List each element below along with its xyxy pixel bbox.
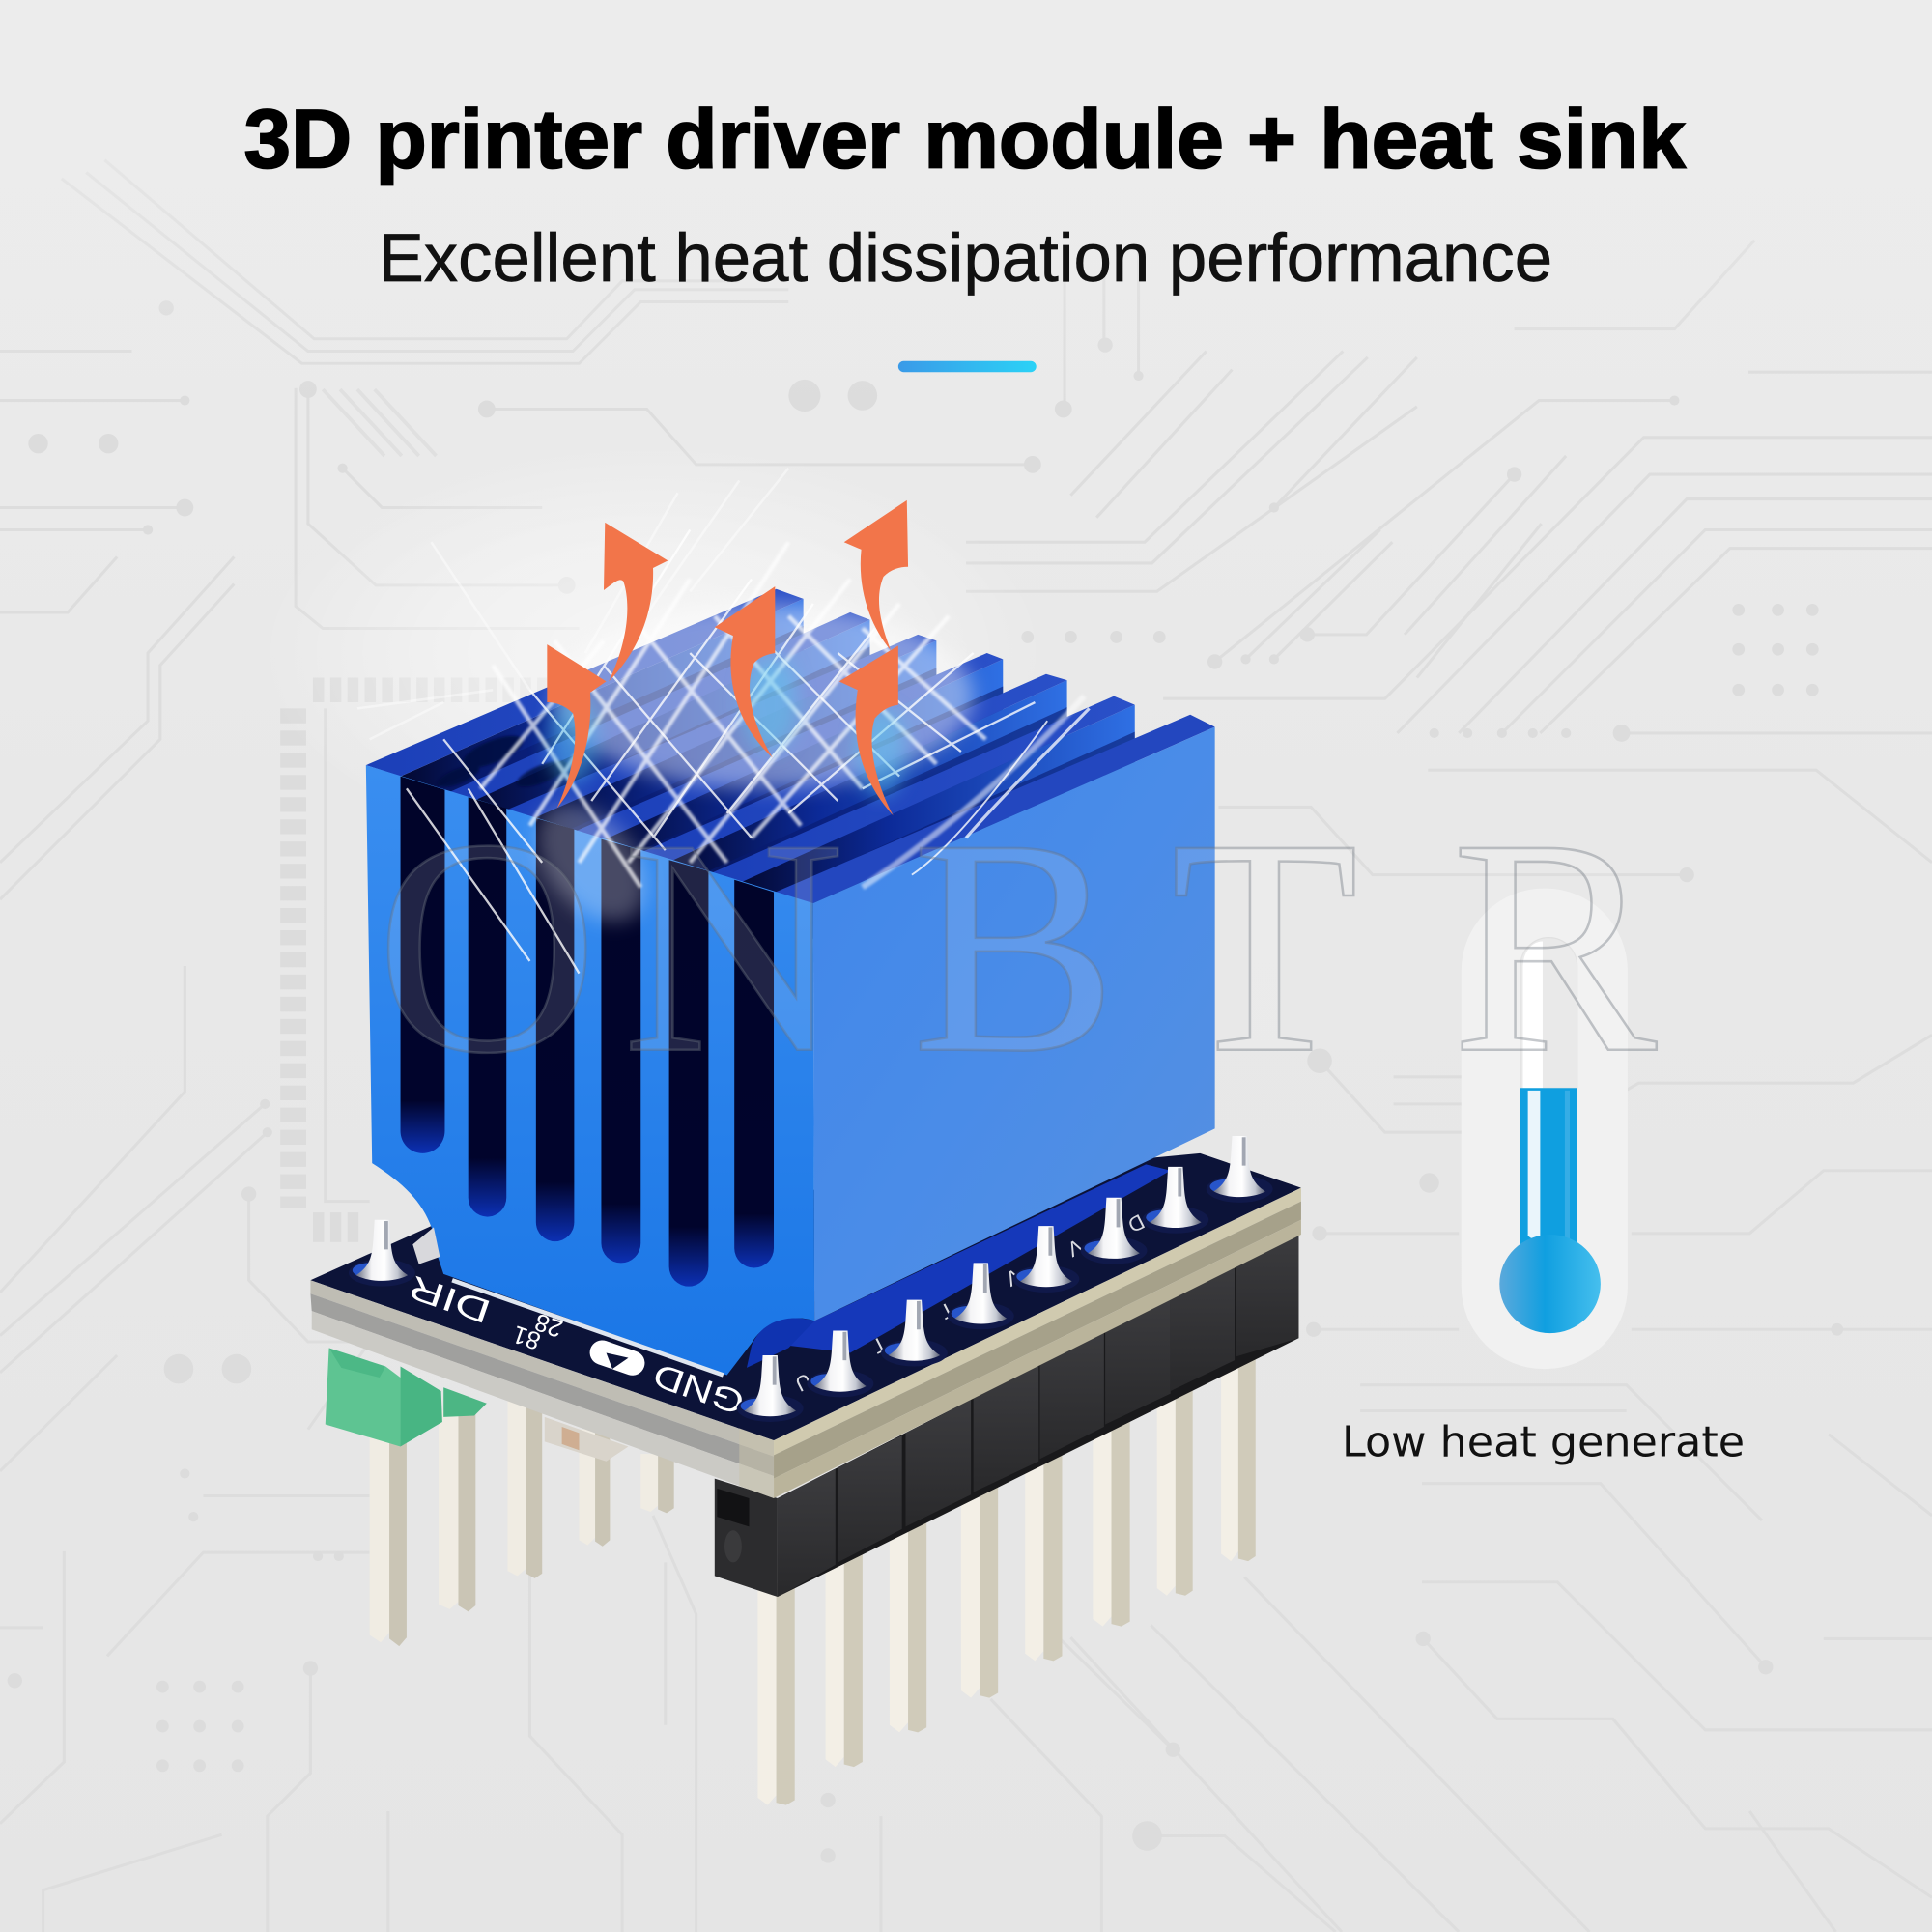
right edge pin letters: T bbox=[936, 1296, 958, 1324]
pcb top surface bbox=[310, 1153, 1301, 1440]
board silk labels bbox=[404, 1209, 1149, 1421]
bulb bbox=[1499, 1235, 1601, 1333]
right edge pin letters: T bbox=[868, 1331, 891, 1358]
fade of traces toward the top bbox=[0, 0, 1932, 407]
label: GND: GND bbox=[649, 1355, 750, 1421]
circuit board bbox=[310, 1153, 1301, 1498]
dark shadow patches on left fins bbox=[435, 729, 571, 792]
watermark: ONBTR bbox=[376, 776, 1659, 1117]
arrow 1 bbox=[604, 523, 668, 681]
subtitle: Excellent heat dissipation performance bbox=[379, 219, 1552, 296]
pcb right edge bbox=[774, 1188, 1301, 1498]
arrow 5 bbox=[839, 645, 898, 815]
pcb left edge bbox=[310, 1280, 774, 1498]
white light haze behind heat sink bbox=[259, 443, 1047, 863]
base fillet bbox=[747, 1319, 814, 1368]
white light rays over fins bbox=[357, 469, 1090, 974]
thermometer bbox=[1462, 889, 1628, 1369]
label: 28: 28 bbox=[531, 1308, 566, 1342]
front row header pins bbox=[757, 1350, 1256, 1805]
mercury column bbox=[1520, 1088, 1577, 1254]
slots bbox=[401, 777, 774, 1287]
back row pins bbox=[370, 1399, 674, 1646]
accent bar bbox=[898, 361, 1037, 372]
heat arrows bbox=[547, 500, 908, 815]
icon: board marking pill bbox=[586, 1337, 648, 1378]
title: 3D printer driver module + heat sink bbox=[244, 92, 1687, 185]
green jumper bbox=[326, 1348, 487, 1446]
right edge pin letters: V bbox=[1002, 1264, 1025, 1292]
blue reflection on board bbox=[788, 1164, 1171, 1353]
fin walls and top strips bbox=[366, 589, 1215, 974]
black pin header bbox=[715, 1233, 1298, 1597]
label: 81: 81 bbox=[509, 1320, 544, 1354]
label: low heat generate: Low heat generate bbox=[1342, 1419, 1745, 1467]
right edge pin letters bbox=[791, 1209, 1149, 1397]
resistor component bbox=[545, 1417, 629, 1462]
arrow 4 bbox=[547, 644, 607, 809]
capsule bbox=[1462, 889, 1628, 1369]
cyan glow around arrows bbox=[549, 653, 906, 796]
label: DIR: DIR bbox=[404, 1267, 496, 1330]
glass tube bbox=[1520, 938, 1577, 1088]
arrow 3 bbox=[715, 586, 775, 757]
right edge pin letters: U bbox=[791, 1368, 816, 1397]
solder pins bbox=[349, 1136, 1273, 1422]
right edge pin letters: V bbox=[1063, 1234, 1087, 1263]
white edge line under heat sink bbox=[452, 1280, 724, 1375]
right edge pin letters: D bbox=[1124, 1209, 1149, 1237]
right face bbox=[813, 727, 1215, 1321]
arrow 2 bbox=[844, 500, 908, 650]
front face bbox=[366, 765, 814, 1375]
heat sink bbox=[366, 589, 1215, 1375]
